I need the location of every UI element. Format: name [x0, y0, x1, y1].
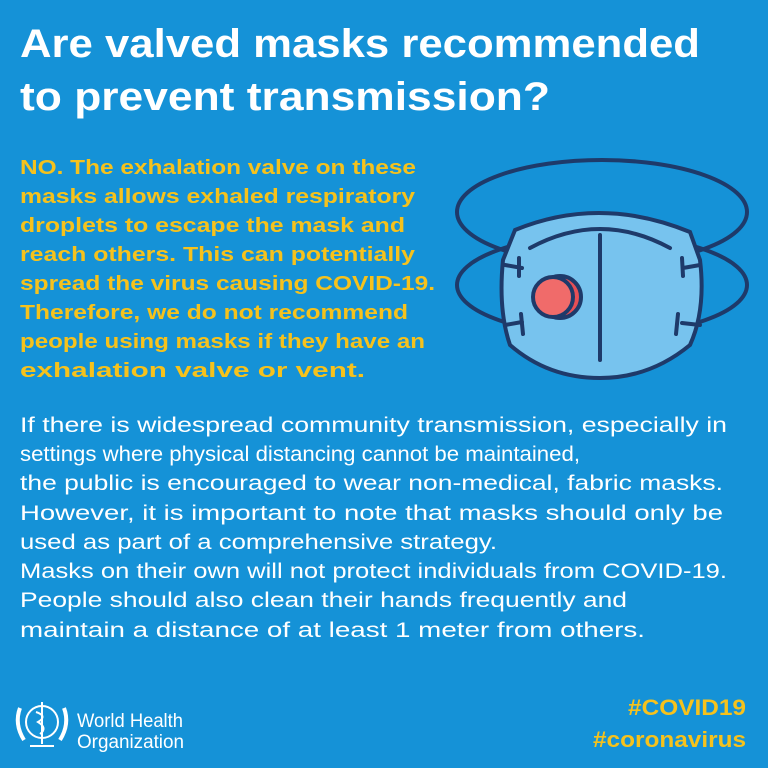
body text: However, it is important to note that masks should only be [20, 502, 723, 525]
body text [20, 414, 727, 642]
yellow answer text: reach others. This can potentially [20, 244, 416, 266]
hashtags: #COVID19 [628, 695, 746, 720]
title: Are valved masks recommended [20, 22, 700, 66]
yellow answer text: NO. The exhalation valve on these [20, 157, 416, 179]
WHO logo [18, 702, 184, 753]
body text: settings where physical distancing cannot be maintained, [20, 443, 580, 466]
body text: the public is encouraged to wear non-medical, fabric masks. [20, 472, 723, 495]
body text: If there is widespread community transmission, especially in [20, 414, 727, 437]
yellow answer text [20, 157, 435, 382]
WHO text: Organization [77, 732, 184, 753]
icon: valved mask [457, 160, 747, 378]
yellow answer text: spread the virus causing COVID-19. [20, 273, 435, 295]
yellow answer text: masks allows exhaled respiratory [20, 186, 416, 208]
WHO text [77, 711, 184, 753]
title [20, 22, 700, 119]
hashtags [593, 695, 746, 752]
hashtags: #coronavirus [593, 727, 746, 752]
yellow answer text: exhalation valve or vent. [20, 360, 365, 382]
body text: Masks on their own will not protect individuals from COVID-19. [20, 560, 727, 583]
yellow answer text: Therefore, we do not recommend [20, 302, 408, 324]
yellow answer text: droplets to escape the mask and [20, 215, 405, 237]
body text: People should also clean their hands frequently and [20, 589, 627, 612]
title: to prevent transmission? [20, 75, 550, 119]
body text: maintain a distance of at least 1 meter from others. [20, 619, 645, 642]
body text: used as part of a comprehensive strategy. [20, 531, 497, 554]
WHO text: World Health [77, 711, 183, 732]
yellow answer text: people using masks if they have an [20, 331, 425, 353]
icon: WHO emblem [18, 702, 66, 746]
